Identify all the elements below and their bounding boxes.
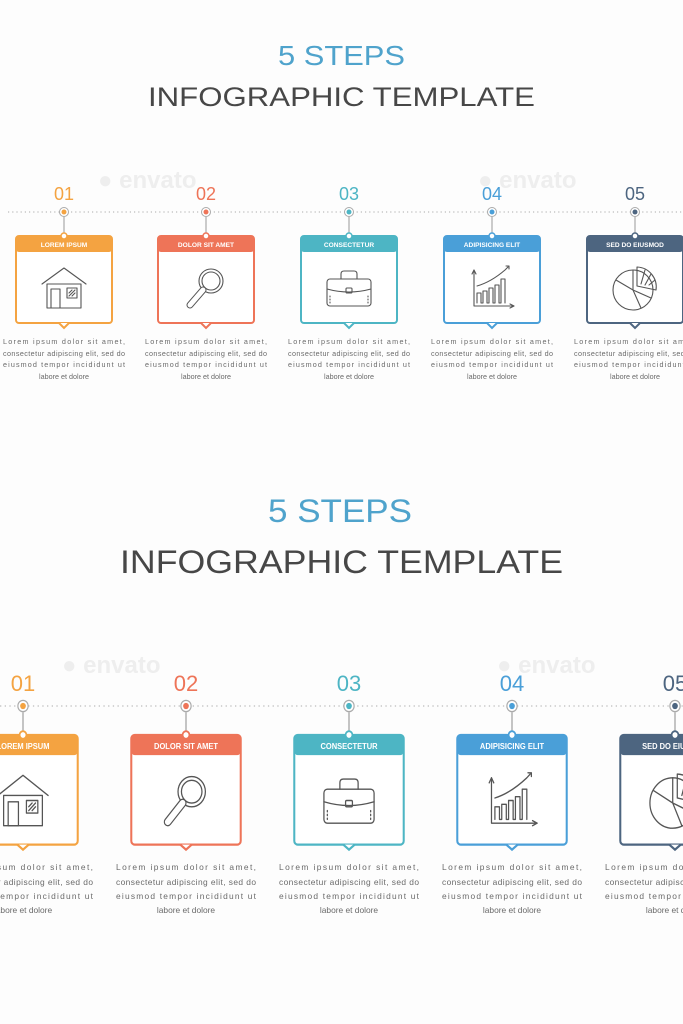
descriptions top: eiusmod tempor incididunt ut bbox=[145, 360, 267, 369]
descriptions top: consectetur adipiscing elit, sed do bbox=[145, 349, 267, 358]
descriptions top: Lorem ipsum dolor sit amet, bbox=[145, 337, 267, 346]
step 1 card bottom bbox=[0, 700, 78, 850]
step numbers top: 02 bbox=[196, 184, 216, 204]
descriptions bottom: Lorem ipsum dolor sit amet, bbox=[116, 862, 256, 872]
step numbers bottom: 01 bbox=[11, 671, 35, 696]
descriptions top: eiusmod tempor incididunt ut bbox=[288, 360, 410, 369]
watermark bottom: ● envato bbox=[497, 652, 596, 679]
descriptions bottom: consectetur adipiscing elit, sed do bbox=[279, 877, 419, 887]
descriptions bottom: labore et dolore bbox=[320, 905, 378, 915]
descriptions bottom: consectetur adipiscing elit, sed do bbox=[442, 877, 582, 887]
step numbers top: 03 bbox=[339, 184, 359, 204]
descriptions top: eiusmod tempor incididunt ut bbox=[3, 360, 125, 369]
step 2 card top bbox=[158, 208, 254, 328]
descriptions top: consectetur adipiscing elit, sed do bbox=[288, 349, 410, 358]
descriptions top: labore et dolore bbox=[181, 372, 231, 381]
descriptions top: consectetur adipiscing elit, sed do bbox=[431, 349, 553, 358]
descriptions top: labore et dolore bbox=[324, 372, 374, 381]
step 2 card bottom bbox=[131, 700, 241, 850]
watermark top bbox=[98, 167, 577, 194]
descriptions bottom: labore et dolore bbox=[157, 905, 215, 915]
step numbers top bbox=[54, 184, 645, 204]
step numbers top: 05 bbox=[625, 184, 645, 204]
descriptions top: labore et dolore bbox=[467, 372, 517, 381]
title: 5 steps (top): 5 STEPS bbox=[278, 40, 405, 71]
watermark bottom: ● envato bbox=[62, 652, 161, 679]
descriptions bottom: Lorem ipsum dolor sit amet, bbox=[442, 862, 582, 872]
watermark top: ● envato bbox=[478, 167, 577, 194]
step 5 card bottom bbox=[620, 700, 683, 850]
descriptions bottom: consectetur adipiscing elit, sed do bbox=[116, 877, 256, 887]
step 5 card top: SED DO EIUSMOD bbox=[606, 242, 664, 249]
step numbers bottom: 02 bbox=[174, 671, 198, 696]
step numbers top: 04 bbox=[482, 184, 502, 204]
descriptions top: Lorem ipsum dolor sit amet, bbox=[3, 337, 125, 346]
step numbers bottom: 03 bbox=[337, 671, 361, 696]
step 3 card top bbox=[301, 208, 397, 328]
timeline bottom bbox=[0, 705, 683, 707]
descriptions bottom: Lorem ipsum dolor sit amet, bbox=[279, 862, 419, 872]
step numbers top: 01 bbox=[54, 184, 74, 204]
step numbers bottom: 04 bbox=[500, 671, 524, 696]
descriptions top: Lorem ipsum dolor sit amet, bbox=[431, 337, 553, 346]
watermark bottom bbox=[62, 652, 596, 679]
watermark top: ● envato bbox=[98, 167, 197, 194]
step 1 card top bbox=[16, 208, 112, 328]
descriptions top: labore et dolore bbox=[39, 372, 89, 381]
step 3 card top: CONSECTETUR bbox=[324, 242, 374, 249]
title: infographic template (bottom): INFOGRAPHIC TEMPLATE bbox=[120, 544, 563, 580]
descriptions top: eiusmod tempor incididunt ut bbox=[431, 360, 553, 369]
descriptions top: consectetur adipiscing elit, sed do bbox=[3, 349, 125, 358]
step 2 card top: DOLOR SIT AMET bbox=[178, 242, 234, 249]
descriptions bottom: eiusmod tempor incididunt ut bbox=[116, 891, 257, 901]
title: infographic template (top): INFOGRAPHIC TEMPLATE bbox=[148, 82, 535, 112]
step numbers bottom bbox=[11, 671, 683, 696]
step 2 card bottom: DOLOR SIT AMET bbox=[154, 741, 218, 751]
step 3 card bottom: CONSECTETUR bbox=[320, 741, 378, 751]
descriptions bottom: eiusmod tempor incididunt ut bbox=[279, 891, 420, 901]
descriptions top: labore et dolore bbox=[610, 372, 660, 381]
timeline top bbox=[8, 211, 683, 213]
descriptions top: Lorem ipsum dolor sit amet, bbox=[288, 337, 410, 346]
title: 5 steps (bottom): 5 STEPS bbox=[268, 493, 412, 529]
descriptions bottom bbox=[0, 862, 683, 915]
descriptions bottom: labore et dolore bbox=[483, 905, 541, 915]
step 4 card top: ADIPISICING ELIT bbox=[464, 242, 520, 249]
step 4 card bottom bbox=[457, 700, 567, 850]
descriptions top bbox=[3, 337, 683, 381]
step 4 card top bbox=[444, 208, 540, 328]
step 1 card top: LOREM IPSUM bbox=[41, 242, 88, 249]
descriptions bottom: eiusmod tempor incididunt ut bbox=[442, 891, 583, 901]
step 4 card bottom: ADIPISICING ELIT bbox=[480, 741, 544, 751]
step 5 card top bbox=[587, 208, 683, 328]
step 3 card bottom bbox=[294, 700, 404, 850]
